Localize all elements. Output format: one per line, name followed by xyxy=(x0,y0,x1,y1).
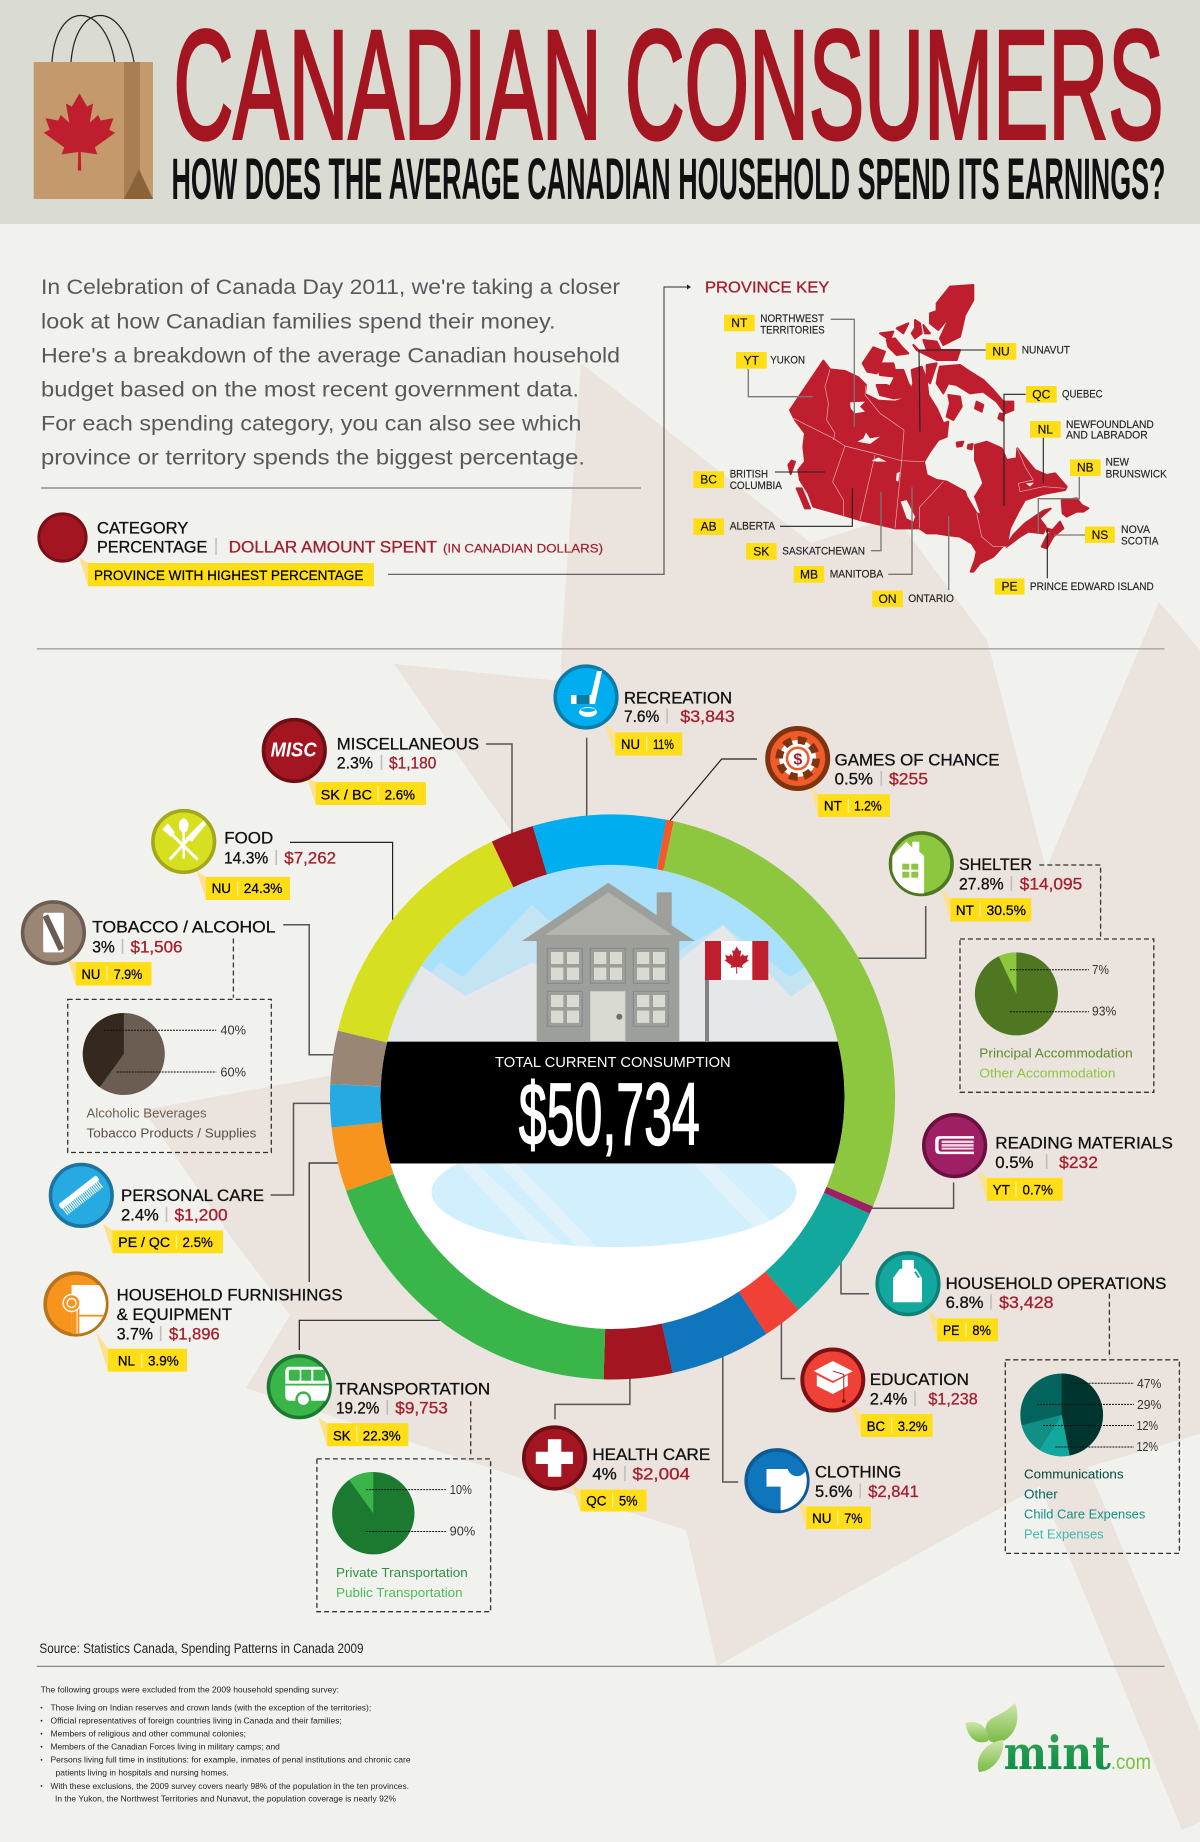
category: transportation: TRANSPORTATION xyxy=(336,1380,490,1398)
icon: hockey stick and puck xyxy=(555,666,617,728)
panel: shelter breakdown: 7% xyxy=(1092,963,1109,977)
category: miscellaneous: 2.3% xyxy=(337,754,373,772)
connector: recreation xyxy=(586,738,588,816)
pie chart: shelter xyxy=(975,952,1058,1035)
provincial borders xyxy=(793,369,1065,547)
dashed link: tobacco breakdown xyxy=(232,938,234,998)
panel: tobacco and alcohol breakdown xyxy=(68,999,271,1152)
category: transportation: 19.2% xyxy=(336,1400,380,1418)
house xyxy=(522,883,695,1042)
icon: misc xyxy=(264,720,325,781)
category: household furnishings and equipment: 3.7% xyxy=(117,1326,153,1344)
dashed link: household operations breakdown xyxy=(1108,1294,1110,1358)
category: personal care: 2.5% xyxy=(182,1235,213,1250)
icon: drink can xyxy=(23,902,84,964)
footnotes: With these exclusions, the 2009 survey covers nearly 98% of the population in the ten provinces. xyxy=(50,1781,409,1791)
category: household operations xyxy=(877,1253,1166,1341)
connector: household furnishings xyxy=(309,1163,340,1282)
category: household furnishings and equipment: HOUSEHOLD FURNISHINGS xyxy=(117,1287,342,1305)
panel: tobacco and alcohol breakdown: 60% xyxy=(220,1066,246,1080)
logo: mint.com: .com xyxy=(1111,1751,1151,1774)
category: games of chance xyxy=(768,728,1000,817)
category: food xyxy=(153,811,336,900)
map key: province labels: ONTARIO xyxy=(908,593,954,605)
map key: province labels: ALBERTA xyxy=(730,520,776,532)
category: tobacco and alcohol: 3% xyxy=(92,938,115,956)
category: shelter: NT xyxy=(956,903,974,918)
panel: tobacco and alcohol breakdown: 40% xyxy=(220,1024,246,1038)
category: shelter: 27.8% xyxy=(959,876,1004,894)
panel: transportation breakdown xyxy=(317,1459,491,1612)
icon: comb xyxy=(51,1165,112,1226)
panel: transportation breakdown: Private Transportation xyxy=(336,1566,468,1580)
map of Canada xyxy=(788,285,1088,572)
icon: book xyxy=(924,1115,985,1176)
segment: shelter xyxy=(669,846,870,1197)
segment: miscellaneous xyxy=(503,850,540,864)
category: miscellaneous xyxy=(264,720,479,805)
category: clothing: $2,841 xyxy=(868,1483,919,1501)
category: games of chance: 0.5% xyxy=(835,771,873,789)
category: personal care: PERSONAL CARE xyxy=(121,1187,264,1205)
map key: province labels: BRITISH xyxy=(730,468,768,480)
category: reading materials: 0.7% xyxy=(1022,1182,1053,1197)
source line: Source: Statistics Canada, Spending Patterns in Canada 2009 xyxy=(39,1641,364,1656)
connector: personal care xyxy=(271,1103,332,1195)
intro text block: For each spending category, you can also see which xyxy=(41,412,582,436)
category: personal care: 2.4% xyxy=(121,1206,159,1224)
map key: province labels: NU xyxy=(992,344,1010,358)
category: food: 24.3% xyxy=(244,881,282,896)
intro text block: Here's a breakdown of the average Canadian household xyxy=(41,343,620,367)
map key: province labels: SCOTIA xyxy=(1121,536,1159,548)
category: transportation: 22.3% xyxy=(363,1428,401,1444)
category: transportation xyxy=(268,1356,490,1446)
icon: graduation cap xyxy=(802,1350,863,1410)
footnotes: Members of the Canadian Forces living in military camps; and xyxy=(50,1742,280,1752)
panel: shelter breakdown xyxy=(960,939,1154,1092)
footnotes: Members of religious and other communal colonies; xyxy=(50,1728,246,1738)
category: clothing: 5.6% xyxy=(815,1483,853,1501)
category: reading materials: READING MATERIALS xyxy=(995,1134,1173,1152)
category: recreation: 11% xyxy=(653,737,674,752)
connector: household operations xyxy=(841,1260,869,1294)
category: education: EDUCATION xyxy=(870,1371,969,1389)
category: food: FOOD xyxy=(224,830,273,848)
category: games of chance: NT xyxy=(824,798,842,813)
icon: misc: MISC xyxy=(271,740,317,762)
category: household operations: 8% xyxy=(972,1323,991,1338)
category: household furnishings and equipment: 3.9% xyxy=(148,1354,179,1369)
category: clothing: CLOTHING xyxy=(815,1464,901,1482)
footnotes: The following groups were excluded from the 2009 household spending survey: xyxy=(41,1684,339,1694)
lakes xyxy=(850,402,1034,522)
icon: shopping bag xyxy=(34,16,153,199)
category: reading materials: $232 xyxy=(1059,1154,1098,1172)
donut ring xyxy=(355,840,870,1354)
category: food: NU xyxy=(212,881,231,896)
category: shelter: SHELTER xyxy=(959,856,1032,874)
category: tobacco and alcohol: NU xyxy=(82,967,100,982)
segment: personal care xyxy=(355,1085,357,1125)
category: shelter xyxy=(890,833,1082,922)
category: personal care: $1,200 xyxy=(174,1206,228,1224)
panel: household operations breakdown: 12% xyxy=(1136,1419,1158,1433)
panel: household operations breakdown: Other xyxy=(1024,1487,1058,1501)
total label: TOTAL CURRENT CONSUMPTION xyxy=(495,1055,731,1071)
map key: leader lines xyxy=(748,319,1085,590)
panel: household operations breakdown: Child Care Expenses xyxy=(1024,1507,1145,1521)
legend: how to read a category: DOLLAR AMOUNT SPENT xyxy=(229,539,437,557)
panel: household operations breakdown xyxy=(1005,1360,1179,1553)
map key: province labels: SK xyxy=(753,544,769,558)
category: household furnishings and equipment: & EQUIPMENT xyxy=(117,1306,232,1324)
intro text block: province or territory spends the biggest percentage. xyxy=(41,446,585,470)
panel: shelter breakdown: 93% xyxy=(1092,1005,1116,1019)
connector: clothing xyxy=(723,1355,738,1482)
connector: food xyxy=(290,842,393,920)
category: personal care: PE / QC xyxy=(118,1235,170,1250)
province key heading: PROVINCE KEY xyxy=(705,279,830,296)
category: health care: 5% xyxy=(619,1494,638,1509)
segment: recreation xyxy=(540,840,662,850)
panel: tobacco and alcohol breakdown: Tobacco Products / Supplies xyxy=(86,1126,256,1140)
category: tobacco and alcohol: $1,506 xyxy=(130,938,182,956)
map key: province labels: YUKON xyxy=(770,354,805,366)
map key: province labels: COLUMBIA xyxy=(730,480,783,492)
connector: reading materials xyxy=(869,1182,954,1208)
pie chart: transportation xyxy=(332,1472,414,1554)
connector: transportation xyxy=(299,1320,440,1350)
map key: province labels: NORTHWEST xyxy=(760,313,824,325)
segment: food xyxy=(362,864,503,1036)
panel: transportation breakdown: Public Transportation xyxy=(336,1586,463,1600)
category: miscellaneous: SK / BC xyxy=(321,787,372,802)
icon: shirt xyxy=(746,1450,810,1514)
total value: $50,734 xyxy=(519,1064,700,1164)
category: household furnishings and equipment: NL xyxy=(118,1354,135,1369)
map key: province labels: BC xyxy=(700,473,717,487)
category: shelter: 30.5% xyxy=(986,903,1026,918)
category: household operations: PE xyxy=(943,1323,959,1338)
segment: tobacco and alcohol xyxy=(356,1036,362,1085)
category: clothing: NU xyxy=(812,1511,832,1526)
category: transportation: $9,753 xyxy=(395,1400,448,1418)
category: health care: HEALTH CARE xyxy=(592,1446,710,1464)
map key: province labels: AB xyxy=(701,520,717,534)
map key: province labels: MANITOBA xyxy=(830,569,884,581)
map key: province labels: NEWFOUNDLAND xyxy=(1066,419,1154,431)
panel: household operations breakdown: 12% xyxy=(1136,1440,1158,1454)
footnotes: Those living on Indian reserves and crown lands (with the exception of the territories); xyxy=(50,1702,371,1712)
map key: province labels: QC xyxy=(1032,387,1051,401)
panel: household operations breakdown: Communications xyxy=(1024,1468,1124,1482)
map key: province labels: SASKATCHEWAN xyxy=(782,545,865,557)
icon: house xyxy=(890,833,952,897)
category: tobacco and alcohol: 7.9% xyxy=(114,967,142,982)
category: education: 3.2% xyxy=(898,1419,928,1434)
category: education: BC xyxy=(867,1419,885,1434)
category: miscellaneous: MISCELLANEOUS xyxy=(337,736,479,754)
panel: transportation breakdown: 10% xyxy=(450,1483,472,1497)
category: reading materials: 0.5% xyxy=(995,1154,1034,1172)
legend: how to read a category: CATEGORY xyxy=(97,519,188,537)
category: health care xyxy=(524,1427,710,1512)
category: food: $7,262 xyxy=(284,849,336,867)
segment: reading materials xyxy=(847,1197,850,1203)
category: household furnishings and equipment: $1,896 xyxy=(169,1326,220,1344)
icon: cutlery xyxy=(153,811,214,872)
logo: mint.com xyxy=(966,1703,1151,1780)
intro text block xyxy=(41,275,620,470)
category: personal care xyxy=(51,1165,264,1253)
panel: transportation breakdown: 90% xyxy=(450,1525,475,1539)
connector: health care xyxy=(555,1376,630,1419)
category: food: 14.3% xyxy=(224,849,269,867)
panel: household operations breakdown: Pet Expenses xyxy=(1024,1527,1104,1541)
map key: province labels: BRUNSWICK xyxy=(1106,468,1167,480)
category: shelter: $14,095 xyxy=(1020,876,1082,894)
footnotes: In the Yukon, the Northwest Territories and Nunavut, the population coverage is nearly 92% xyxy=(55,1793,396,1803)
category: recreation: RECREATION xyxy=(624,689,732,707)
category: transportation: SK xyxy=(333,1428,351,1444)
category: recreation: NU xyxy=(621,737,640,752)
category: miscellaneous: $1,180 xyxy=(389,754,436,772)
category: household furnishings and equipment xyxy=(45,1273,342,1372)
legend: how to read a category: (IN CANADIAN DOLLARS) xyxy=(443,544,603,556)
dashed link: transportation breakdown xyxy=(470,1401,472,1457)
map key: province labels: MB xyxy=(800,567,818,581)
map key: province labels: ON xyxy=(878,592,896,606)
map key: province labels: PE xyxy=(1001,580,1018,594)
segment: health care xyxy=(604,1348,667,1354)
segment: household operations xyxy=(782,1203,847,1291)
segment: games of chance xyxy=(662,844,669,846)
map key: province labels xyxy=(693,313,1167,607)
intro text block: In Celebration of Canada Day 2011, we're taking a closer xyxy=(41,275,620,299)
category: household operations: HOUSEHOLD OPERATIONS xyxy=(946,1275,1166,1293)
panel: household operations breakdown: 47% xyxy=(1137,1377,1161,1391)
panel: shelter breakdown: Principal Accommodation xyxy=(979,1047,1133,1061)
category: household operations: $3,428 xyxy=(999,1294,1054,1312)
segment: transportation xyxy=(370,1182,604,1354)
category: health care: $2,004 xyxy=(632,1466,690,1484)
flag of Canada xyxy=(705,941,768,1042)
icon: medical cross xyxy=(524,1427,585,1489)
intro text block: budget based on the most recent government data. xyxy=(41,378,579,402)
connector: education xyxy=(781,1320,795,1379)
legend: how to read a category: PROVINCE WITH HIGHEST PERCENTAGE xyxy=(94,568,363,583)
legend: how to read a category xyxy=(39,514,603,586)
background maple leaf xyxy=(144,363,1200,1830)
category: tobacco and alcohol xyxy=(23,902,275,986)
category: games of chance: 1.2% xyxy=(854,798,882,813)
map key: province labels: NEW xyxy=(1106,457,1130,469)
category: health care: 4% xyxy=(592,1466,617,1484)
icon: furniture xyxy=(45,1273,112,1340)
icon: detergent bottle xyxy=(877,1253,939,1314)
connector: miscellaneous xyxy=(486,744,512,835)
category: clothing: 7% xyxy=(844,1511,862,1526)
map key: province labels: NB xyxy=(1077,461,1094,475)
map key: province labels: NL xyxy=(1038,422,1053,436)
panel: shelter breakdown: Other Accommodation xyxy=(979,1066,1116,1080)
header band xyxy=(0,0,1200,224)
segment: clothing xyxy=(667,1313,753,1348)
connector: tobacco and alcohol xyxy=(283,925,335,1055)
connector: shelter xyxy=(856,906,926,958)
category: household operations: 6.8% xyxy=(946,1294,984,1312)
map key: province labels: NT xyxy=(731,316,748,330)
pie chart: household operations xyxy=(1020,1374,1103,1456)
map key: province labels: QUEBEC xyxy=(1062,389,1103,401)
legend: how to read a category: PERCENTAGE xyxy=(97,539,207,557)
center illustration xyxy=(380,865,850,1333)
segment: education xyxy=(753,1291,782,1313)
category: miscellaneous: 2.6% xyxy=(385,787,415,802)
footnotes: Official representatives of foreign countries living in Canada and their families; xyxy=(50,1716,342,1726)
footnotes xyxy=(41,1684,411,1803)
intro text block: look at how Canadian families spend their money. xyxy=(41,310,556,334)
logo: mint.com: mint xyxy=(1004,1726,1112,1780)
panel: household operations breakdown: 29% xyxy=(1137,1398,1161,1412)
map key: province labels: TERRITORIES xyxy=(760,324,825,336)
category: education: 2.4% xyxy=(870,1390,908,1408)
icon: bus xyxy=(268,1356,331,1418)
category: education: $1,238 xyxy=(928,1390,978,1408)
dashed link: shelter breakdown xyxy=(1039,865,1101,937)
map key: province labels: NUNAVUT xyxy=(1022,345,1070,357)
category: games of chance: $255 xyxy=(889,771,928,789)
category: health care: QC xyxy=(586,1494,607,1509)
category: tobacco and alcohol: TOBACCO / ALCOHOL xyxy=(92,919,276,937)
category: recreation xyxy=(555,666,735,756)
category: reading materials: YT xyxy=(993,1182,1010,1197)
icon: roulette wheel: $ xyxy=(793,752,802,768)
panel: tobacco and alcohol breakdown: Alcoholic Beverages xyxy=(86,1107,207,1121)
map key: province labels: YT xyxy=(744,353,760,367)
arrow: legend to province key xyxy=(388,284,691,574)
category: education xyxy=(802,1350,978,1437)
category: games of chance: GAMES OF CHANCE xyxy=(835,752,1000,770)
map key: province labels: PRINCE EDWARD ISLAND xyxy=(1030,581,1154,593)
icon: roulette wheel xyxy=(768,728,828,788)
category: recreation: $3,843 xyxy=(680,708,735,726)
connector: games of chance xyxy=(670,759,757,821)
category: reading materials xyxy=(924,1115,1173,1201)
map key: province labels: AND LABRADOR xyxy=(1066,430,1148,442)
category: recreation: 7.6% xyxy=(624,708,660,726)
map key: province labels: NOVA xyxy=(1121,524,1151,536)
pie chart: tobacco and alcohol xyxy=(83,1013,165,1095)
segment: household furnishings xyxy=(357,1125,370,1182)
footnotes: patients living in hospitals and nursing homes. xyxy=(56,1768,229,1778)
footnotes: Persons living full time in institutions: for example, inmates of penal institutions and chronic care xyxy=(50,1755,411,1765)
category: clothing xyxy=(746,1450,919,1529)
map key: province labels: NS xyxy=(1092,528,1108,542)
